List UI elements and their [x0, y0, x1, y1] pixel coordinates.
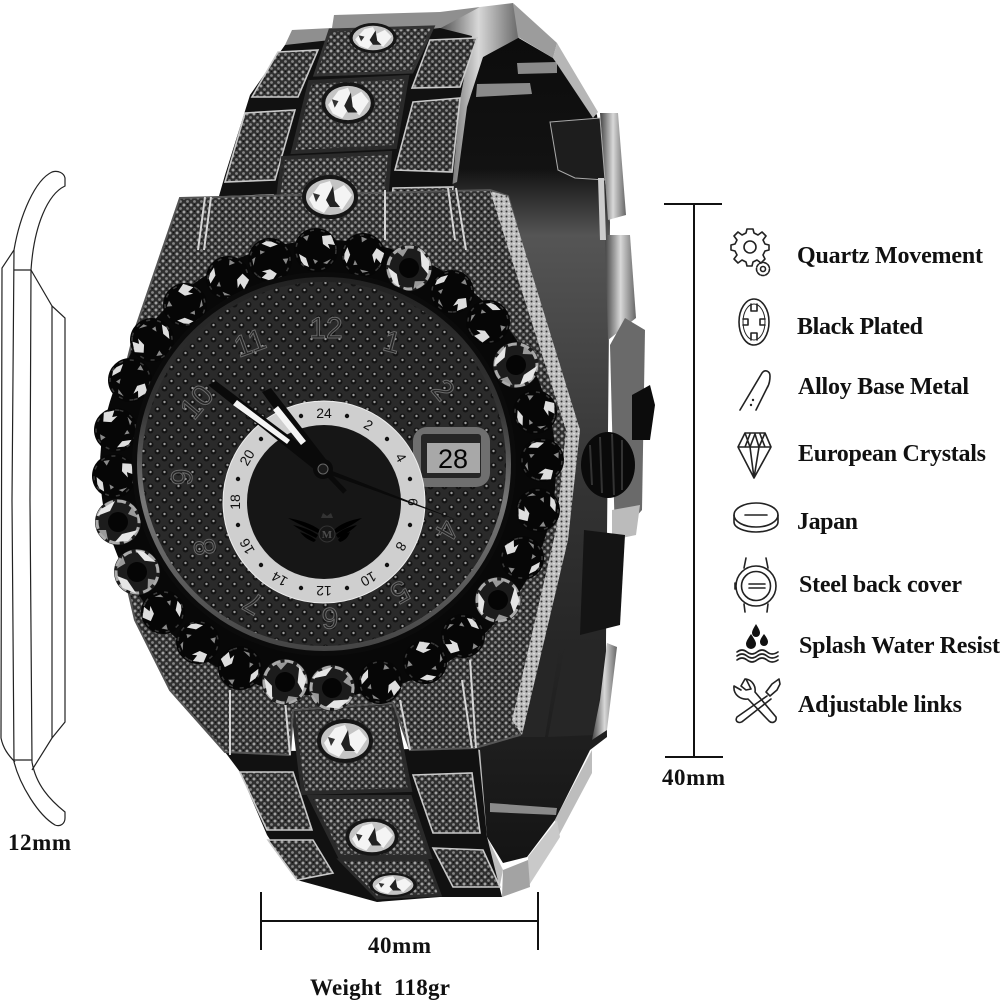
24 hour ring: 24 — [316, 405, 332, 421]
bracelet crystal: below bezel — [317, 719, 373, 763]
bezel backing — [100, 240, 556, 696]
watch hands — [208, 381, 460, 521]
feature: adjustable links — [734, 679, 962, 722]
icon: gears — [731, 229, 770, 276]
feature: european crystals — [738, 433, 986, 478]
dial numerals: 2 — [425, 373, 461, 407]
label: Alloy Base Metal — [798, 374, 969, 400]
24 hour ring — [223, 401, 425, 603]
24 hour ring: 8 — [392, 539, 410, 554]
dial numerals: 6 — [322, 601, 338, 634]
feature: quartz movement — [731, 229, 983, 276]
24 hour ring: 20 — [236, 447, 258, 468]
icon: ring — [739, 299, 769, 345]
bracelet crystal: third — [302, 175, 358, 219]
icon: disc — [734, 503, 778, 532]
icon: watch — [735, 558, 776, 612]
24 hour ring: 12 — [316, 583, 332, 599]
feature: japan — [734, 503, 858, 535]
24 hour ring: 4 — [392, 450, 410, 465]
dial numerals: 5 — [384, 573, 415, 610]
dial numerals: 8 — [188, 536, 223, 558]
dial numerals: 12 — [309, 312, 343, 345]
lower inner link panels — [515, 645, 605, 737]
date window — [413, 427, 490, 487]
feature: alloy base metal — [740, 371, 969, 410]
upper outer bracelet edge — [285, 3, 626, 220]
glass ring — [137, 277, 511, 651]
label: Adjustable links — [798, 692, 962, 718]
24 hour ring: 16 — [236, 536, 258, 557]
brand logo — [288, 513, 362, 542]
weight label: Weight 118gr — [310, 975, 450, 1000]
dial numerals: 11 — [230, 323, 270, 364]
height label: 40mm — [662, 765, 725, 790]
clasp — [550, 118, 645, 635]
icon: wrench and screwdriver — [734, 679, 780, 722]
upper bracelet silhouette — [205, 28, 472, 245]
lower bracelet silhouette — [225, 748, 502, 902]
crown — [581, 385, 655, 498]
bracelet crystal: top — [349, 23, 397, 53]
24 hour ring: 6 — [405, 498, 421, 506]
label: Splash Water Resist — [799, 633, 1000, 659]
lower outer bracelet edge — [472, 643, 617, 897]
24 hour ring: 18 — [227, 494, 243, 510]
panel: watch photograph — [89, 3, 655, 902]
upper bracelet links — [213, 27, 477, 240]
watch case — [100, 190, 578, 755]
label: Steel back cover — [799, 572, 962, 598]
bracelet crystal: bottom — [369, 873, 417, 897]
lower inner bars — [490, 803, 557, 815]
label: Japan — [797, 509, 858, 535]
dial numerals: 4 — [428, 514, 465, 545]
24 hour ring: 14 — [269, 568, 290, 590]
inner bars — [476, 62, 557, 97]
case right crystal edge — [490, 191, 580, 735]
dial numerals — [166, 312, 465, 634]
bracelet inner wall — [450, 37, 610, 863]
dial numerals: 7 — [238, 584, 269, 621]
case link dividers — [198, 188, 476, 755]
brand logo: M — [322, 529, 333, 541]
date window: 28 — [438, 444, 468, 474]
dial numerals: 9 — [166, 468, 199, 486]
bracelet crystal: lower — [345, 818, 399, 856]
icon: diamond — [738, 433, 771, 478]
dial numerals: 10 — [174, 379, 221, 426]
dial face — [142, 282, 506, 646]
dial outer ring — [132, 272, 516, 656]
lower bracelet links — [240, 703, 500, 898]
label: Black Plated — [797, 314, 924, 340]
feature: black plated — [739, 299, 924, 345]
side profile drawing — [1, 171, 65, 826]
dial numerals: 1 — [380, 324, 404, 361]
width label: 40mm — [368, 933, 431, 958]
feature: splash water resist — [737, 624, 1000, 662]
bracelet crystal: second — [321, 82, 375, 124]
width dimension — [261, 892, 538, 950]
icon: metal strip — [740, 371, 770, 410]
feature: steel back cover — [735, 558, 962, 612]
height dimension — [664, 204, 723, 757]
bezel stones — [89, 224, 570, 715]
24 hour ring: 10 — [358, 568, 379, 590]
icon: water drops — [737, 624, 778, 662]
label: European Crystals — [798, 441, 986, 467]
24 hour ring: 2 — [361, 416, 376, 434]
side thickness label: 12mm — [8, 830, 71, 855]
label: Quartz Movement — [797, 243, 983, 269]
